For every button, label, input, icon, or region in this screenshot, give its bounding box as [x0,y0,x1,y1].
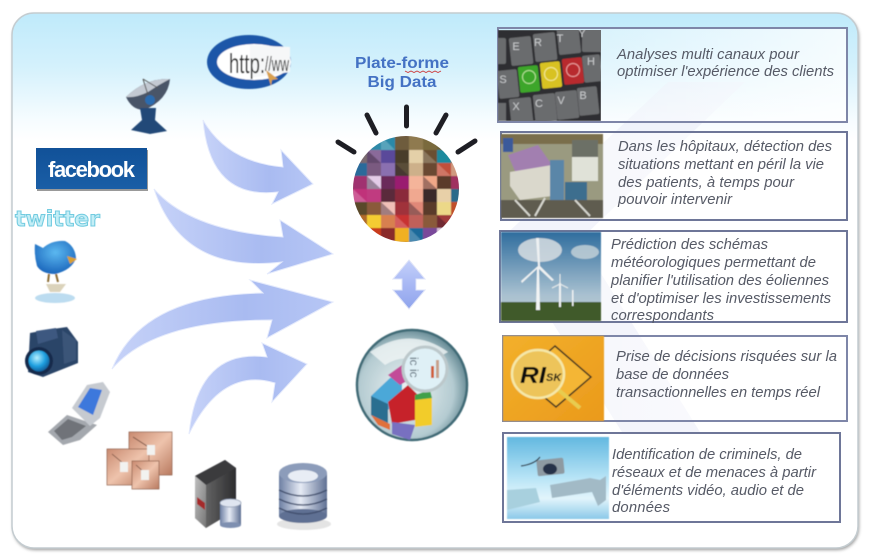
text: criminal identification [612,447,817,516]
panel: criminal identification [503,433,840,522]
image: keyboard with smileys: R [534,37,542,49]
text: criminal identification: réseaux et de menaces à partir [612,465,817,481]
panel: customer experience analytics [496,26,847,127]
panel: hospitals [501,132,847,220]
text: customer experience [616,47,835,80]
icon: facebook logo [36,148,148,191]
text: hospitals: Dans les hôpitaux, détection des [618,139,833,155]
icon: analytics sphere [356,329,468,441]
image: keyboard with smileys: H [587,56,595,68]
text: weather and wind turbines: Prédiction des schémas [611,237,769,253]
text: customer experience: Analyses multi canaux pour [616,47,800,63]
icon: mobile phone [48,382,110,445]
text: risky decisions: base de données [616,367,730,383]
text: weather and wind turbines: météorologiques permettant de [611,255,816,271]
image: security camera [507,437,609,519]
icon: facebook logo: facebook [48,157,136,182]
heading: Plate-forme Big Data [355,55,449,91]
text: criminal identification: Identification de criminels, de [612,447,802,463]
text: weather and wind turbines: planifier l'utilisation des éoliennes [610,273,830,289]
text: customer experience: optimiser l'expérience des clients [617,64,835,80]
image: keyboard with smileys [498,30,601,121]
text: weather and wind turbines [610,237,832,324]
icon: server with disk [195,460,241,528]
image: risk magnifier [503,336,604,421]
image: risk magnifier: RI [520,362,547,388]
icon: twitter bird [35,241,77,303]
panel: risky decisions [503,336,847,421]
image: keyboard with smileys: C [535,98,543,110]
image: keyboard with smileys: E [512,41,520,53]
arrow: dish to platform [203,120,313,204]
icon: web address http: //ww [265,54,289,76]
text: hospitals [617,139,833,208]
text: hospitals: des patients, à temps pour [618,175,795,191]
image: keyboard with smileys: B [579,90,587,102]
heading: Plate-forme Big Data: Big Data [368,74,437,91]
image: wind turbines [501,232,601,321]
icon: camera [25,327,78,377]
icon: web address http: http: [229,48,265,79]
icon: satellite dish [126,79,170,134]
icon: mosaic globe [353,136,459,242]
image: neonatal care unit [501,134,603,218]
text: weather and wind turbines: et d'optimiser les investissements [611,291,832,307]
text: risky decisions: Prise de décisions risquées sur la [616,349,837,365]
icon: analytics sphere: ic ic [407,357,421,378]
image: keyboard with smileys: S [499,74,507,86]
image: keyboard with smileys: T [557,33,564,45]
text: risky decisions [616,349,837,401]
arrow: data stores to platform [189,343,307,434]
text: criminal identification: données [612,500,671,516]
image: keyboard with smileys: Y [578,28,586,40]
image: keyboard with smileys: X [512,101,520,113]
text: hospitals: situations mettant en péril la vie [618,157,824,173]
text: hospitals: pouvoir intervenir [617,192,733,208]
icon: smarter planet rays [338,107,475,152]
icon: database cylinder [277,463,331,530]
heading: Plate-forme Big Data: Plate-forme [355,55,449,72]
text: criminal identification: d'éléments vidéo, audio et de [612,483,804,499]
image: risk magnifier: SK [546,372,562,384]
image: keyboard with smileys: V [557,95,565,107]
text: weather and wind turbines: correspondants [611,308,715,324]
arrow: social media to platform [154,189,333,274]
icon: RFID chips [107,432,172,489]
arrow: camera and phone to platform [112,280,333,369]
panel: weather and wind turbines [500,231,847,324]
icon: web address http [207,35,291,89]
arrow: double vertical [393,260,425,309]
icon: twitter wordmark: twitter [15,207,101,231]
text: risky decisions: transactionnelles en temps réel [616,385,821,401]
